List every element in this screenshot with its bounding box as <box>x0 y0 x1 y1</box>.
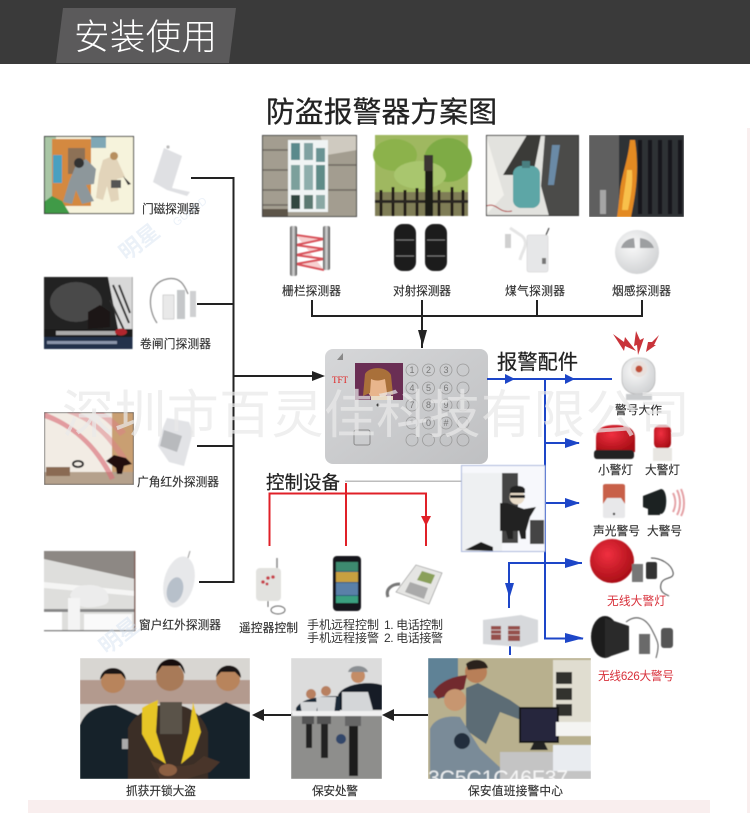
label: 手机远程接警 <box>307 630 379 645</box>
photo: window sensor <box>44 551 135 631</box>
label: arrest: 抓获开锁大盗 <box>126 784 196 798</box>
photo: building fire <box>589 135 684 217</box>
icon: strobe siren <box>603 484 625 518</box>
photo: infrared room <box>44 412 134 485</box>
label: response: 保安处警 <box>312 784 358 798</box>
watermark: star guard: 明星 <box>94 612 144 659</box>
right edge pink strip <box>747 128 750 813</box>
photo: security duty centre: 3C5C1C46F37 <box>428 767 568 790</box>
panel: alarm accessories <box>590 331 684 683</box>
keypad: 8 <box>426 400 431 410</box>
photo: security motorcycles <box>291 658 382 779</box>
label: 广角红外探测器 <box>137 475 219 489</box>
panel: left detectors <box>44 136 221 632</box>
bottom pink band <box>28 800 710 813</box>
page header bar <box>0 0 750 64</box>
label: 煤气探测器 <box>505 284 565 298</box>
icon: window infrared sensor <box>158 551 200 611</box>
connectors: detector wiring <box>191 178 642 582</box>
icon: gas detector <box>505 228 549 272</box>
label: 门磁探测器 <box>142 202 200 216</box>
keypad: 4 <box>409 383 415 393</box>
label: 对射探测器 <box>393 284 451 298</box>
icon: roller door sensor <box>150 278 196 323</box>
photo: burglars at door <box>44 136 134 214</box>
connectors: alarm output lines <box>487 379 612 655</box>
diagram title: 防盗报警器方案图 <box>266 97 497 129</box>
keypad: 9 <box>443 400 449 410</box>
label: 卷闸门探测器 <box>140 337 211 351</box>
arrow: down to control panel <box>418 330 427 346</box>
panel: alarm host <box>325 349 488 464</box>
header title: 安装使用 <box>74 17 217 57</box>
speaker dot <box>376 404 380 406</box>
photo: gas cylinder <box>486 135 579 216</box>
screen <box>355 363 403 400</box>
arrow: red to telephone <box>421 516 431 526</box>
watermark: company name: 深圳市百灵佳科技有限公司 <box>62 387 690 445</box>
label: 警号大作 <box>615 403 662 417</box>
panel: top detectors <box>262 135 684 298</box>
icon: large warning light <box>653 425 672 461</box>
arrow: to control panel <box>312 371 325 381</box>
icon: lightning bolts <box>613 331 659 355</box>
icon: wireless large horn <box>591 616 673 658</box>
icon: wide-angle infrared sensor <box>158 418 193 466</box>
header tab <box>56 8 236 63</box>
label: 声光警号 <box>593 524 640 538</box>
icon: remote control <box>256 558 285 614</box>
label: 2. 电话接警 <box>384 630 443 645</box>
photo: building window <box>262 135 357 217</box>
icon: horn <box>643 489 684 516</box>
label: duty centre: 保安值班接警中心 <box>468 784 563 798</box>
icon: door magnetic sensor <box>153 145 190 196</box>
keypad: 1 <box>409 365 415 375</box>
label: 窗户红外探测器 <box>139 618 221 632</box>
arrow: motorcycles to arrest <box>252 709 291 721</box>
photo: security duty centre <box>428 658 591 790</box>
icon: small warning light <box>594 425 635 459</box>
button <box>354 430 370 445</box>
keypad <box>406 364 469 446</box>
label: 1. 电话控制 <box>384 618 443 632</box>
panel: control devices <box>239 556 443 645</box>
photo: fence and trees <box>373 135 472 216</box>
label: 小警灯 <box>598 463 633 477</box>
TFT label: TFT <box>332 375 349 385</box>
label: 手机远程控制 <box>307 617 379 632</box>
keypad: * <box>410 418 414 428</box>
keypad: 7 <box>409 400 415 410</box>
label: 遥控器控制 <box>239 621 298 635</box>
photo: arrested burglar <box>80 658 250 779</box>
icon: desk telephone <box>387 565 442 604</box>
arrow: duty centre to motorcycles <box>382 709 428 721</box>
keypad: 2 <box>426 365 431 375</box>
shadow line under host <box>345 480 470 482</box>
icon: beam barrier detector <box>290 226 330 276</box>
watermark: star guard <box>94 195 210 659</box>
keypad: 6 <box>443 383 449 393</box>
icon: smoke detector <box>615 230 659 274</box>
keypad: 5 <box>426 383 431 393</box>
watermark: star guard: 明星 <box>114 219 164 266</box>
watermark: star guard: GUARD <box>171 195 210 229</box>
arrows: blue output <box>505 374 584 643</box>
keypad: 3 <box>443 365 449 375</box>
label: 无线626大警号 <box>598 669 674 683</box>
icon: wireless large light <box>590 539 673 596</box>
keypad: # <box>443 418 449 428</box>
image: thief cartoon <box>462 466 545 552</box>
icon: mobile phone <box>333 556 361 611</box>
label: 大警灯 <box>645 463 680 477</box>
keypad: 0 <box>426 418 431 428</box>
connectors: control lines <box>270 483 426 546</box>
label: 无线大警灯 <box>607 594 666 608</box>
label: 栅栏探测器 <box>282 284 341 298</box>
icon: server rack <box>483 615 538 647</box>
icon: photoelectric beam detector <box>394 224 447 271</box>
heading: alarm accessories: 报警配件 <box>497 351 578 374</box>
icon: siren <box>622 358 655 400</box>
photo: night burglary <box>44 277 132 349</box>
label: 烟感探测器 <box>612 284 671 298</box>
heading: control devices: 控制设备 <box>266 472 340 493</box>
label: 大警号 <box>647 524 682 538</box>
